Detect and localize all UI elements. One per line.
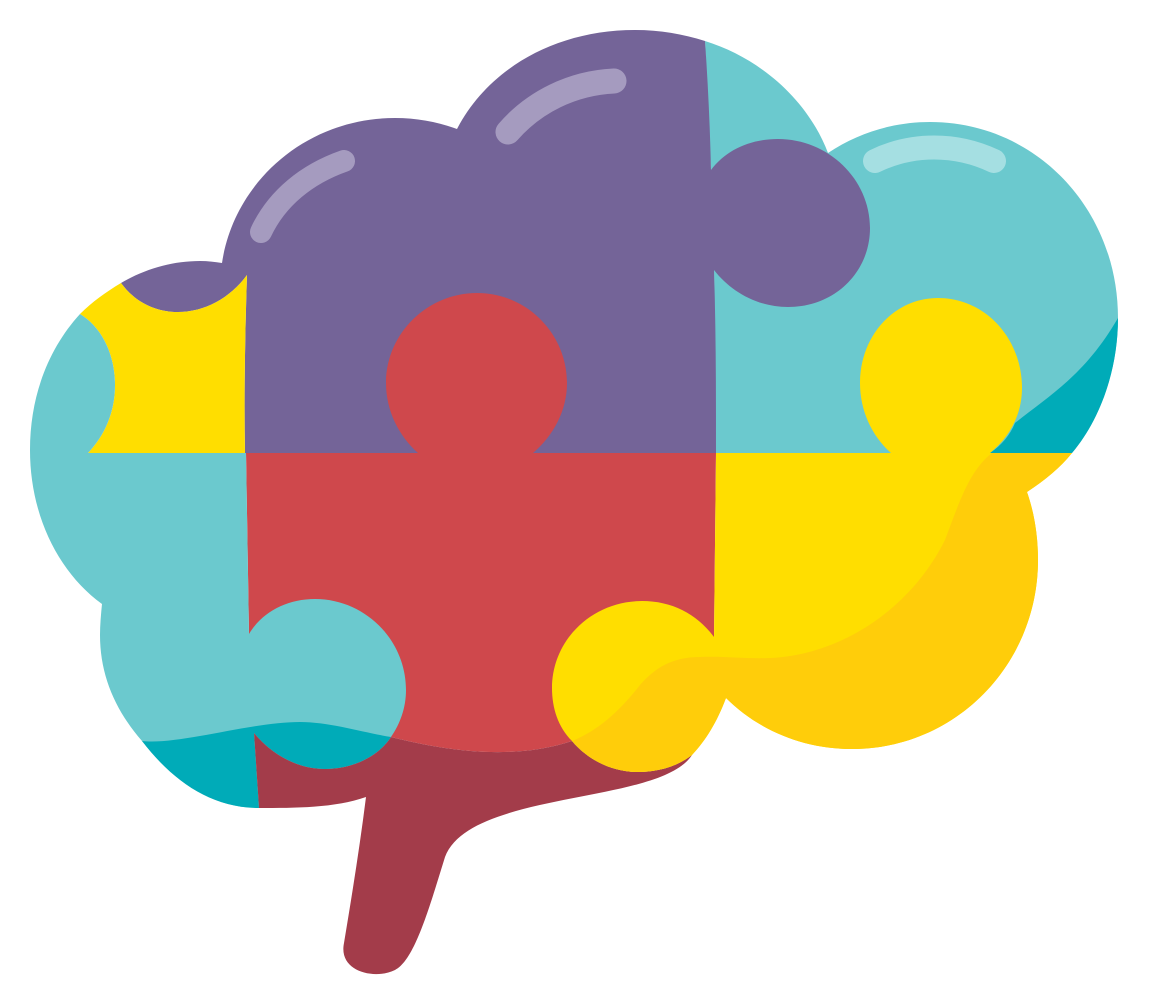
puzzle piece: red centre (246, 293, 716, 752)
shadow: dark red stem (254, 733, 692, 974)
shadow: dark teal right (990, 318, 1118, 453)
puzzle piece: teal right (705, 41, 1118, 453)
puzzle piece: teal left (30, 314, 406, 808)
shadow: dark teal bottom left (142, 722, 391, 808)
puzzle piece: yellow right (552, 298, 1072, 772)
highlight: purple top (508, 81, 614, 132)
highlight: teal right (875, 148, 994, 161)
highlight: purple left (261, 161, 344, 232)
shadow: orange lower right (572, 453, 1072, 772)
puzzle piece: purple top (121, 30, 870, 453)
puzzle piece: yellow top left (80, 275, 247, 453)
